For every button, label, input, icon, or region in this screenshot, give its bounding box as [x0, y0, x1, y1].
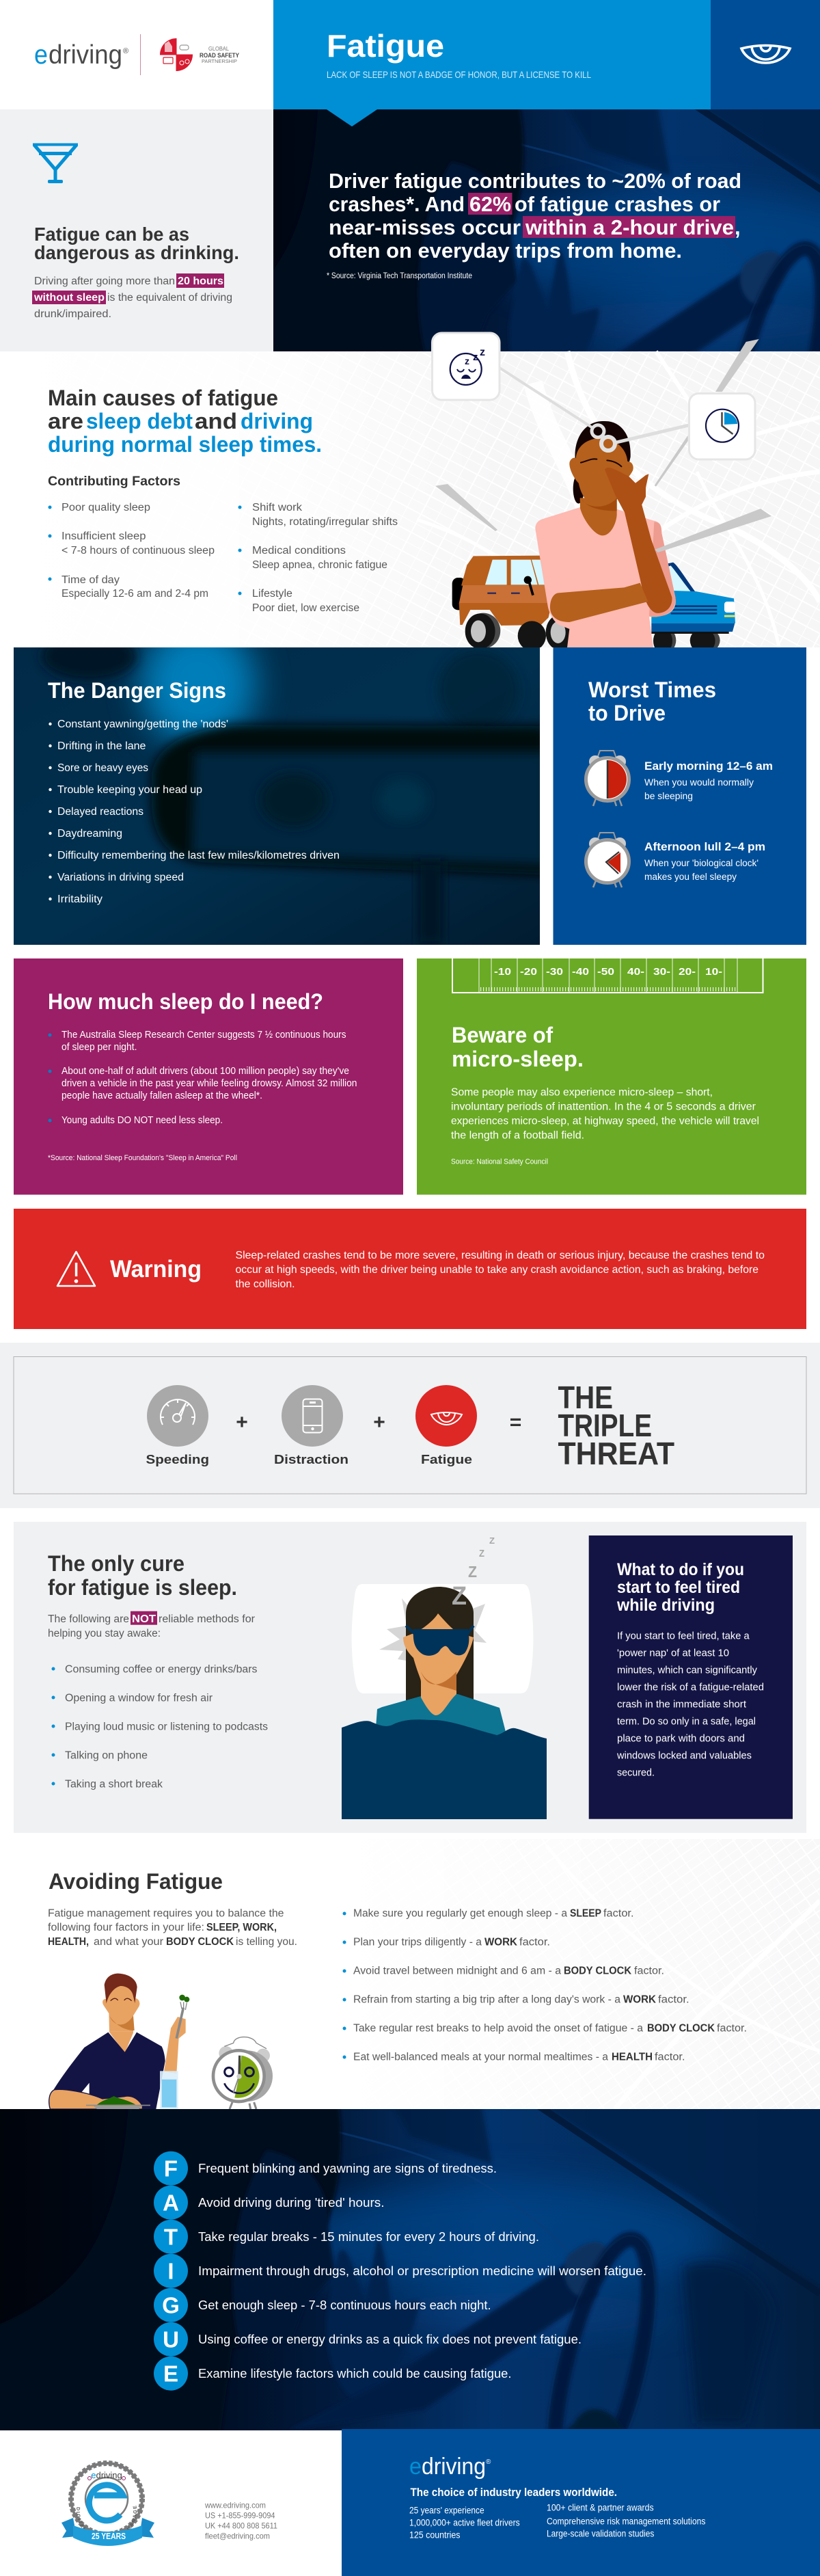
text block — [48, 1611, 255, 1639]
list: unreliable methods: Talking on phone — [65, 1750, 148, 1762]
source note: * Source: Virginia Tech Transportation Institute — [327, 272, 472, 280]
heading: What to do if you — [617, 1560, 744, 1579]
panel: triple threat — [0, 1343, 820, 1508]
list: fatigue factors: BODY CLOCK — [647, 2022, 715, 2034]
text block: is the equivalent of driving — [107, 292, 232, 304]
headline statistic: 62% — [469, 192, 511, 216]
list: danger signs: Daydreaming — [57, 828, 122, 840]
text: early morning — [644, 760, 773, 801]
callout connectors — [500, 368, 689, 451]
panel: how much sleep — [14, 958, 403, 1195]
panel: FATIGUE acronym — [0, 2109, 820, 2430]
list: fatigue factors: Avoid travel between midnight and 6 am - a — [353, 1965, 561, 1976]
list: contributing factors left: Insufficient sleep — [62, 531, 146, 542]
heading — [616, 1560, 744, 1615]
list: sleep facts: The Australia Sleep Research Center suggests 7 ½ continuous hours — [62, 1030, 346, 1041]
list: contributing factors right: Lifestyle — [252, 588, 292, 600]
text: early morning: When you would normally — [644, 777, 754, 788]
text block: the length of a football field. — [451, 1129, 584, 1142]
heading — [588, 677, 716, 725]
text block: Driving after going more than — [34, 276, 175, 287]
heading: during normal sleep times. — [48, 432, 322, 457]
list: fatigue factors: WORK — [623, 1994, 657, 2005]
list: sleep facts: Young adults DO NOT need less sleep. — [62, 1115, 223, 1126]
chart: football field: 10- — [705, 966, 722, 978]
icon: eye — [741, 45, 790, 63]
operator: = — [510, 1411, 521, 1434]
operator: + — [373, 1411, 385, 1434]
illustration: sleeping woman: Z — [489, 1535, 495, 1546]
subheading: Contributing Factors — [48, 474, 180, 489]
text: early morning: Early morning 12–6 am — [644, 760, 773, 773]
panel: micro-sleep — [417, 958, 806, 1195]
panel: hero statistic — [273, 109, 820, 351]
heading — [48, 1551, 237, 1600]
list: acronym letters: I — [167, 2259, 174, 2283]
illustration: tired woman with cars — [452, 421, 735, 654]
list: sleep facts: driven a vehicle in the past year while feeling drowsy. Almost 32 million — [62, 1078, 357, 1089]
source note: Source: National Safety Council — [451, 1158, 548, 1166]
headline statistic: near-misses occur — [329, 215, 521, 239]
list: danger signs: Trouble keeping your head up — [57, 784, 202, 796]
illustration: man eating healthy meal — [49, 1974, 273, 2109]
logo: road safety partnership — [160, 38, 239, 72]
list: fatigue factors: factor. — [655, 2051, 685, 2063]
heading: the triple threat — [558, 1380, 674, 1471]
list: fatigue factors: BODY CLOCK — [564, 1965, 632, 1976]
label: Fatigue — [421, 1453, 472, 1466]
list: danger signs: Sore or heavy eyes — [57, 762, 148, 774]
list: contributing factors left: Especially 12-6 am and 2-4 pm — [62, 588, 208, 600]
icon: fatigue — [415, 1385, 477, 1447]
illustration: sleeping woman — [342, 1535, 547, 1819]
list: unreliable methods: Opening a window for fresh air — [65, 1693, 213, 1704]
icon: sleepy face — [450, 347, 485, 385]
tagline: The choice of industry leaders worldwide. — [410, 2486, 617, 2499]
panel: footer contact — [62, 2460, 277, 2546]
logo: edriving: e — [409, 2454, 422, 2480]
text block: NOT — [132, 1613, 156, 1625]
text: early morning: be sleeping — [644, 791, 693, 801]
list: fatigue factors: factor. — [658, 1994, 689, 2005]
panel: logos header — [34, 34, 239, 75]
list: acronym letters: F — [164, 2156, 178, 2181]
logo: edriving: driving — [422, 2454, 486, 2480]
contact details: US +1-855-999-9094 — [205, 2510, 275, 2520]
illustration: sleeping woman: Z — [468, 1563, 477, 1581]
icon: sleepy face: z — [480, 347, 485, 358]
chart: football field: -10 — [494, 966, 511, 978]
list: danger signs: Difficulty remembering the last few miles/kilometres driven — [57, 850, 340, 861]
list: fatigue factors: WORK — [484, 1936, 518, 1948]
heading: How much sleep do I need? — [48, 989, 323, 1014]
badge: 25 years: DIGITAL DRIVER RISK MANAGEMENT — [77, 2506, 137, 2530]
heading — [34, 224, 239, 263]
list: contributing factors left: Poor quality sleep — [62, 502, 150, 513]
text block: place to park with doors and — [617, 1732, 745, 1744]
list: experience: 1,000,000+ active fleet drivers — [409, 2518, 520, 2528]
text block: Sleep-related crashes tend to be more severe, resulting in death or serious injury, because the crashes tend to — [235, 1250, 765, 1261]
text block: term. Do so only in a safe, legal — [617, 1715, 756, 1727]
panel: worst times to drive — [554, 647, 806, 945]
heading: dangerous as drinking. — [34, 242, 239, 263]
heading: the triple threat: TRIPLE — [558, 1408, 652, 1443]
text block — [616, 1630, 764, 1778]
text block: occur at high speeds, with the driver being unable to take any crash avoidance action, such as braking, before — [235, 1264, 758, 1276]
list: fatigue factors: Eat well-balanced meals at your normal mealtimes - a — [353, 2051, 608, 2063]
icon: warning triangle — [57, 1252, 95, 1286]
chart: football field: 40- — [627, 966, 644, 978]
list: sleep facts — [48, 1030, 357, 1126]
heading: the triple threat: THREAT — [558, 1436, 674, 1471]
heading: the triple threat: THE — [558, 1380, 613, 1415]
heading: for fatigue is sleep. — [48, 1575, 237, 1600]
title: Fatigue — [327, 28, 444, 64]
panel: the only cure — [14, 1522, 806, 1833]
badge: 25 years — [62, 2460, 154, 2546]
headline statistic: crashes*. And — [329, 192, 465, 216]
icon: clock — [706, 410, 739, 442]
list: acronym text: Get enough sleep - 7-8 continuous hours each night. — [198, 2298, 491, 2312]
logo: road safety partnership: PARTNERSHIP — [202, 58, 237, 64]
callout: sleepy face — [432, 333, 500, 400]
list: contributing factors right: Medical conditions — [252, 545, 346, 556]
heading: to Drive — [588, 701, 666, 725]
list: fatigue factors: Make sure you regularly get enough sleep - a — [353, 1907, 567, 1919]
panel: drinking comparison — [0, 109, 273, 351]
contact details: www.edriving.com — [204, 2501, 266, 2510]
list: fatigue factors: factor. — [519, 1936, 550, 1948]
text block: experiences micro-sleep, at highway speed, the vehicle will travel — [451, 1116, 759, 1127]
icon: clock afternoon — [586, 833, 629, 887]
list: acronym letters — [154, 2151, 188, 2391]
list: contributing factors right: Sleep apnea, chronic fatigue — [252, 559, 387, 571]
text block: BODY CLOCK — [166, 1936, 234, 1948]
contact details: UK +44 800 808 5611 — [205, 2521, 277, 2531]
panel: warning — [14, 1209, 806, 1329]
logo: edriving: ® — [123, 47, 128, 55]
headline statistic: , — [735, 215, 741, 239]
text: afternoon lull: When your 'biological clock' — [644, 858, 758, 868]
map background — [342, 1839, 820, 2109]
list: fatigue factors: HEALTH — [612, 2051, 653, 2063]
text block: drunk/impaired. — [34, 308, 111, 320]
heading: start to feel tired — [617, 1578, 740, 1597]
headline statistic — [329, 169, 741, 263]
text block: involuntary periods of inattention. In the 4 or 5 seconds a driver — [451, 1101, 756, 1113]
text block: crash in the immediate short — [617, 1698, 747, 1710]
heading: are — [48, 409, 83, 433]
icon: sleepy face: z — [473, 351, 478, 363]
text block: without sleep — [33, 292, 105, 304]
text block: windows locked and valuables — [616, 1749, 752, 1761]
list: danger signs: Delayed reactions — [57, 806, 144, 818]
list: fatigue factors: Take regular rest breaks to help avoid the onset of fatigue - a — [353, 2022, 643, 2034]
contact details — [204, 2501, 277, 2540]
heading: Avoiding Fatigue — [49, 1869, 223, 1894]
chart: football field: -20 — [520, 966, 537, 978]
list: capabilities: Large-scale validation studies — [547, 2529, 655, 2539]
chart: football field: 20- — [679, 966, 696, 978]
icon: clock early morning — [586, 751, 629, 806]
list: acronym text: Impairment through drugs, alcohol or prescription medicine will worsen fatigue. — [198, 2264, 646, 2278]
illustration: sleeping woman: Z — [452, 1582, 467, 1611]
panel: the danger signs — [14, 622, 547, 945]
divider — [140, 34, 141, 75]
logo: edriving: driving — [49, 40, 122, 70]
illustration: sleeping woman: Z — [479, 1548, 484, 1559]
text block — [32, 273, 232, 320]
headline statistic: within a 2-hour drive — [525, 215, 734, 239]
icon: smiling clock — [213, 2037, 273, 2109]
list: sleep facts: people have actually fallen asleep at the wheel*. — [62, 1090, 262, 1101]
icon: distraction — [282, 1385, 343, 1447]
text block: 20 hours — [178, 276, 223, 287]
list: acronym text — [198, 2162, 646, 2380]
heading: driving — [241, 409, 313, 433]
text block: If you start to feel tired, take a — [617, 1630, 750, 1641]
list: acronym letters: A — [163, 2190, 179, 2215]
text block: 'power nap' of at least 10 — [617, 1647, 729, 1659]
subtitle: LACK OF SLEEP IS NOT A BADGE OF HONOR, BUT A LICENSE TO KILL — [327, 69, 591, 80]
list: contributing factors right: Poor diet, low exercise — [252, 602, 359, 614]
panel: main causes — [0, 333, 820, 654]
heading — [48, 386, 322, 457]
list: danger signs: Constant yawning/getting the 'nods' — [57, 719, 228, 730]
photo: eyes in rear-view mirror — [14, 622, 547, 945]
icon: cocktail glass — [33, 144, 78, 183]
text: afternoon lull: makes you feel sleepy — [644, 872, 737, 882]
heading: The only cure — [48, 1551, 184, 1576]
chart: football field: 30- — [653, 966, 670, 978]
list: unreliable methods: Playing loud music or listening to podcasts — [65, 1721, 268, 1733]
text block: minutes, which can significantly — [617, 1664, 757, 1676]
list: experience — [409, 2506, 520, 2540]
label: Distraction — [274, 1453, 348, 1466]
headline statistic: of fatigue crashes or — [515, 192, 720, 216]
list: acronym text: Take regular breaks - 15 minutes for every 2 hours of driving. — [198, 2230, 539, 2244]
list: capabilities: Comprehensive risk management solutions — [547, 2517, 706, 2527]
text block: lower the risk of a fatigue-related — [617, 1681, 764, 1693]
pointer triangle — [327, 109, 377, 126]
text block: is telling you. — [236, 1936, 297, 1948]
orange car — [452, 556, 574, 651]
icon: sleepy face: z — [465, 355, 469, 366]
list: capabilities: 100+ client & partner awards — [547, 2503, 654, 2513]
list: fatigue factors: factor. — [603, 1907, 634, 1919]
panel: footer company facts — [342, 2429, 820, 2576]
list: contributing factors left: Time of day — [62, 574, 120, 586]
text block: secured. — [617, 1767, 655, 1778]
heading: Worst Times — [588, 677, 716, 702]
text block: SLEEP, WORK, — [206, 1922, 277, 1933]
list: fatigue factors: Plan your trips diligently - a — [353, 1936, 482, 1948]
panel: avoiding fatigue — [48, 1839, 820, 2109]
chart: football field — [452, 958, 763, 993]
contact details: fleet@edriving.com — [205, 2531, 270, 2540]
list: fatigue factors: factor. — [634, 1965, 664, 1976]
list: fatigue factors: factor. — [717, 2022, 747, 2034]
list: contributing factors right — [238, 502, 398, 614]
logo: road safety partnership: ROAD SAFETY — [200, 52, 239, 59]
list: fatigue factors — [343, 1907, 747, 2063]
list: contributing factors left: < 7-8 hours of continuous sleep — [62, 545, 215, 556]
callout: clock — [689, 394, 755, 459]
text block: Some people may also experience micro-sleep – short, — [451, 1087, 713, 1098]
list: unreliable methods — [52, 1664, 268, 1790]
icon: speeding — [147, 1385, 208, 1447]
list: sleep facts: of sleep per night. — [62, 1042, 137, 1053]
list: acronym text: Using coffee or energy drinks as a quick fix does not prevent fatigue. — [198, 2333, 582, 2346]
label: Speeding — [146, 1453, 209, 1466]
list: experience: 25 years' experience — [409, 2506, 484, 2516]
headline statistic: Driver fatigue contributes to ~20% of road — [329, 169, 741, 193]
chart: football field: -30 — [546, 966, 563, 978]
list: contributing factors right: Shift work — [252, 502, 302, 513]
chart: football field: -50 — [597, 966, 614, 978]
woman — [535, 421, 676, 647]
text block: Fatigue management requires you to balance the — [48, 1907, 284, 1919]
logo: road safety partnership: GLOBAL — [208, 46, 230, 52]
heading — [452, 1023, 584, 1071]
list: capabilities — [547, 2503, 706, 2539]
list: danger signs: Variations in driving speed — [57, 872, 184, 883]
heading: Main causes of fatigue — [48, 386, 278, 410]
logo: edriving: ® — [486, 2458, 491, 2466]
list: fatigue factors: SLEEP — [570, 1907, 601, 1919]
photo: driver yawning — [273, 109, 820, 351]
list: experience: 125 countries — [409, 2530, 461, 2540]
text block: helping you stay awake: — [48, 1628, 161, 1639]
list: acronym text: Avoid driving during 'tired' hours. — [198, 2196, 384, 2210]
list: sleep facts: About one-half of adult drivers (about 100 million people) say they've — [62, 1066, 349, 1077]
heading: micro-sleep. — [452, 1047, 584, 1071]
badge: 25 years: edriving — [91, 2470, 122, 2480]
list: acronym letters: G — [162, 2293, 180, 2318]
text block — [235, 1250, 765, 1290]
list: acronym text: Frequent blinking and yawning are signs of tiredness. — [198, 2162, 497, 2175]
list: contributing factors left — [48, 502, 215, 600]
text block: HEALTH, — [48, 1936, 89, 1948]
heading: Warning — [110, 1256, 202, 1283]
heading: while driving — [616, 1596, 715, 1615]
callout rays — [435, 339, 771, 552]
text block: the collision. — [235, 1278, 295, 1290]
operator: + — [236, 1411, 248, 1434]
text block — [48, 1907, 297, 1948]
map background — [0, 351, 820, 647]
text block: and what your — [94, 1936, 163, 1948]
list: acronym letters: T — [164, 2225, 178, 2249]
photo: driver yawning — [0, 2109, 820, 2430]
text block: reliable methods for — [159, 1613, 255, 1625]
source note: *Source: National Sleep Foundation's "Sleep in America" Poll — [48, 1154, 237, 1162]
heading: Beware of — [452, 1023, 553, 1047]
heading: The Danger Signs — [48, 678, 226, 703]
list: danger signs: Drifting in the lane — [57, 740, 146, 752]
list: danger signs — [49, 719, 340, 905]
text: afternoon lull: Afternoon lull 2–4 pm — [644, 840, 765, 853]
list: contributing factors right: Nights, rotating/irregular shifts — [252, 516, 398, 528]
text block: The following are — [48, 1613, 129, 1625]
panel: eye icon — [711, 0, 820, 109]
badge: 25 years: 25 YEARS — [92, 2531, 126, 2541]
text: afternoon lull — [644, 840, 765, 882]
heading: sleep debt — [86, 409, 193, 433]
heading: and — [195, 409, 237, 433]
chart: football field: -40 — [572, 966, 589, 978]
callout: what to do — [589, 1535, 793, 1819]
headline statistic: often on everyday trips from home. — [329, 239, 682, 263]
list: unreliable methods: Consuming coffee or energy drinks/bars — [65, 1664, 258, 1676]
heading: Fatigue can be as — [34, 224, 189, 245]
text block: following four factors in your life: — [48, 1922, 204, 1933]
text block — [451, 1087, 759, 1142]
list: danger signs: Irritability — [57, 894, 102, 905]
logo: edriving: e — [34, 40, 48, 70]
list: fatigue factors: Refrain from starting a big trip after a long day's work - a — [353, 1994, 620, 2005]
list: acronym letters: U — [163, 2327, 179, 2352]
panel: title banner — [273, 0, 711, 109]
list: acronym letters: E — [163, 2361, 178, 2386]
list: unreliable methods: Taking a short break — [65, 1779, 163, 1790]
list: acronym text: Examine lifestyle factors which could be causing fatigue. — [198, 2367, 511, 2380]
blue car — [651, 563, 735, 654]
